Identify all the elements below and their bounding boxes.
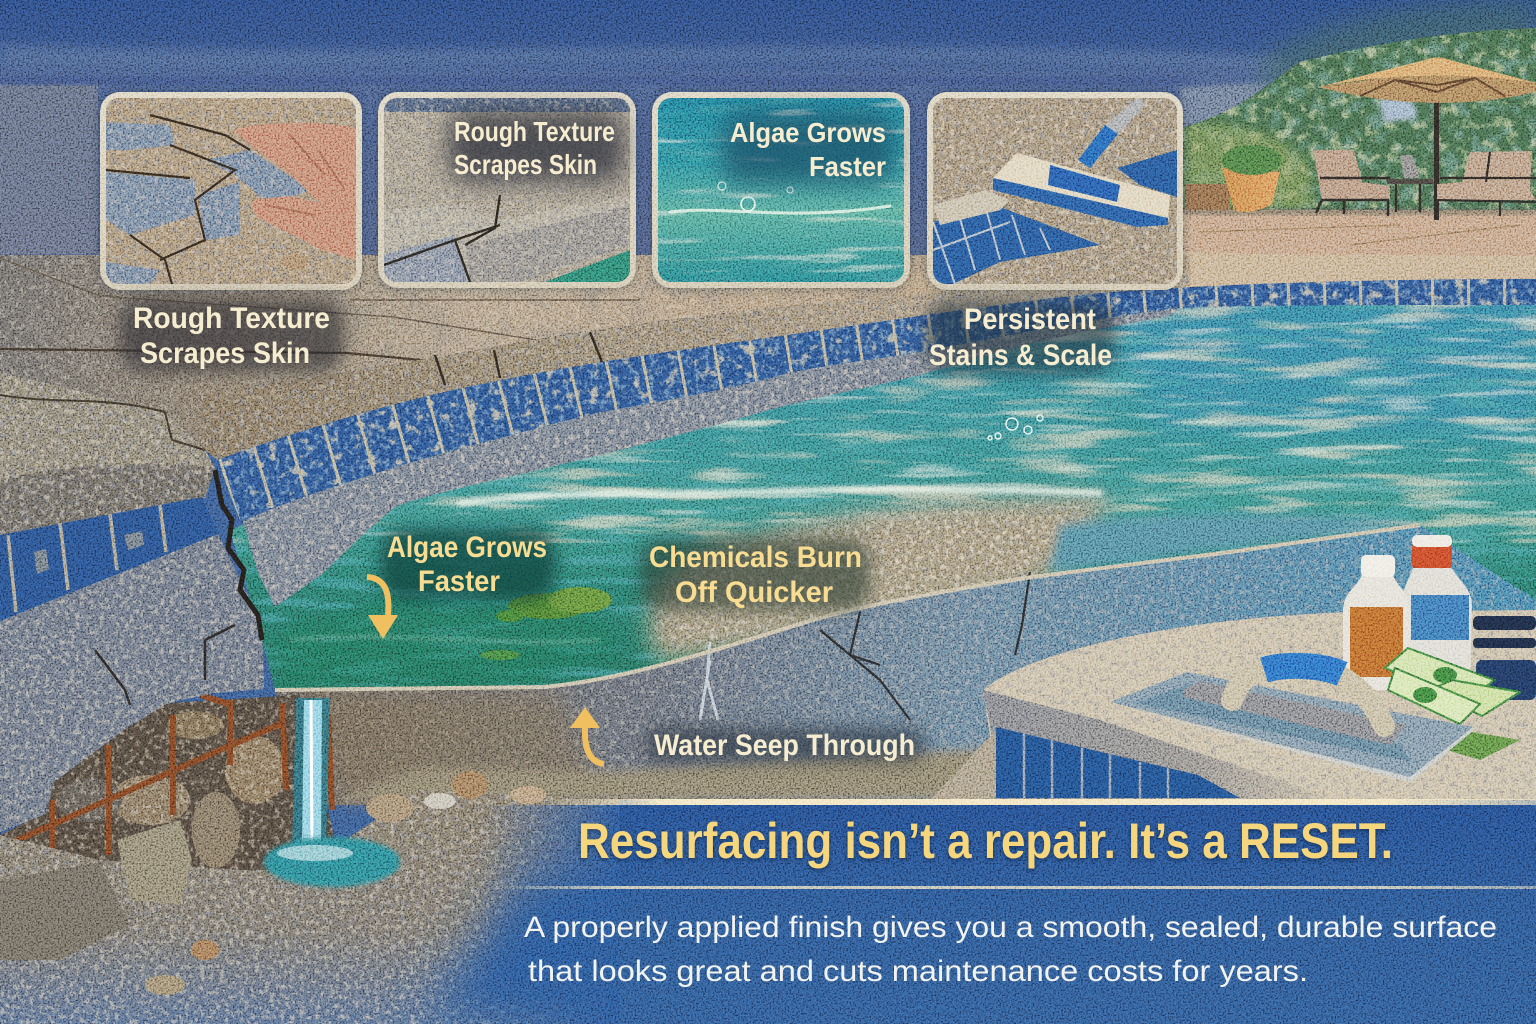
- pebble ledge under tile band: [240, 300, 1190, 610]
- callout: chemicals burn off: Off Quicker: [675, 576, 833, 609]
- water surface highlights: [290, 425, 1536, 642]
- callout: water seep through: Water Seep Through: [654, 729, 915, 762]
- right stone ledge with tile: [930, 606, 1536, 800]
- icon: chemical bottle with red cap: [1402, 535, 1472, 690]
- caption: card three: Faster: [809, 151, 886, 182]
- callout: algae grows with arrow: [367, 528, 555, 639]
- pool water: [230, 303, 1536, 693]
- callout: persistent stains: Stains & Scale: [929, 339, 1112, 372]
- icon: algae patch: [480, 587, 612, 660]
- arrow: up: [570, 707, 604, 764]
- arrow: down: [367, 577, 398, 639]
- callout: algae grows with arrow: Faster: [418, 565, 500, 598]
- caption: card three: Algae Grows: [730, 117, 886, 148]
- pool deck surface: [0, 250, 1200, 455]
- caption: card three: [722, 112, 894, 184]
- headline: Resurfacing isn’t a repair. It’s a RESET.: [578, 813, 1393, 869]
- icon: water bubbles: [988, 415, 1043, 440]
- left tile band: [0, 497, 218, 621]
- patio floor and coping: [1180, 208, 1536, 290]
- callout: rough texture: [120, 298, 345, 372]
- body text: that looks great and cuts maintenance costs for years.: [528, 955, 1308, 988]
- callout: persistent stains: Persistent: [964, 303, 1096, 336]
- exposed rebar cavity: [0, 694, 335, 870]
- coping front face: [200, 270, 1200, 465]
- card: scrub brush on stained tile: [927, 92, 1183, 290]
- icon: trowel: [1110, 666, 1473, 782]
- callout: rough texture: Rough Texture: [133, 302, 330, 335]
- icon: patio sofa: [1437, 151, 1536, 216]
- icon: patio side table: [1387, 155, 1433, 212]
- background garden and patio scene: [1183, 28, 1536, 210]
- step edge: [275, 525, 1420, 690]
- lower pool wall: [270, 520, 1536, 805]
- icon: patio umbrella: [1318, 58, 1536, 220]
- callout: rough texture: Scrapes Skin: [140, 337, 310, 370]
- caption: card two: Scrapes Skin: [454, 149, 597, 180]
- rubble block: [0, 792, 240, 960]
- broken wall chunk: [0, 470, 270, 835]
- card: rough surface with hand: [100, 92, 362, 290]
- headline: Resurfacing isn’t a repair. It’s a RESET.: [578, 815, 1393, 871]
- pool floor and gravel: [0, 771, 620, 1024]
- cracked left slab: [0, 372, 220, 537]
- callout: chemicals burn off: Chemicals Burn: [649, 541, 862, 574]
- callout: persistent stains: [925, 300, 1115, 374]
- card: algae water: [652, 92, 910, 288]
- background: blue wall and upper band: [0, 0, 1536, 272]
- icon: dollar bills: [1385, 648, 1520, 760]
- icon: chemical bottle with orange label: [1343, 555, 1410, 690]
- callout: chemicals burn off: [640, 538, 870, 610]
- caption: card two: [448, 112, 624, 182]
- card: cracked coping: [378, 92, 636, 288]
- bottom banner: [420, 799, 1536, 1024]
- icon: patio armchair: [1313, 150, 1390, 216]
- body text: A properly applied finish gives you a smooth, sealed, durable surface: [524, 911, 1497, 944]
- icon: hose coil: [1473, 616, 1536, 700]
- water seep stream and pool: [264, 698, 400, 887]
- icon: patio planter: [1185, 145, 1282, 212]
- caption: card two: Rough Texture: [454, 116, 615, 147]
- callout: algae grows with arrow: Algae Grows: [387, 531, 547, 564]
- waterline tile band: [210, 275, 1536, 525]
